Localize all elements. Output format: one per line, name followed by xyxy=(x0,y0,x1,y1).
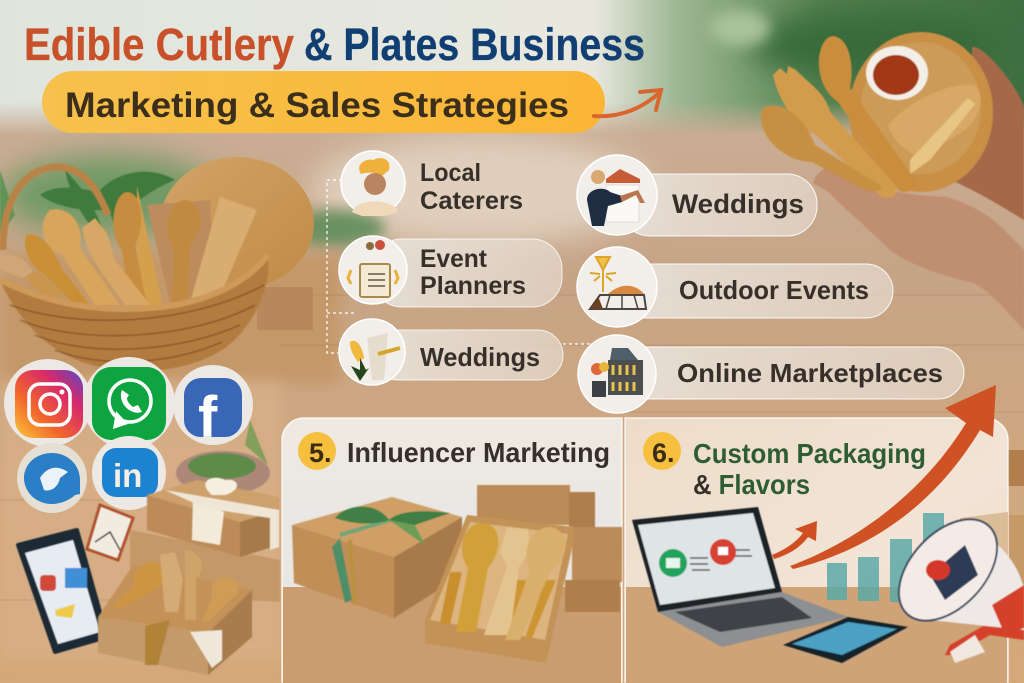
icon: Instagram xyxy=(4,359,92,447)
small spoon xyxy=(761,106,881,191)
box behind megaphone xyxy=(960,512,1008,585)
kraft boxes behind tray xyxy=(477,485,622,612)
lower box xyxy=(130,530,280,602)
plant leaves behind basket xyxy=(0,170,175,240)
icon: Facebook: f xyxy=(198,385,218,450)
sticks xyxy=(440,572,462,625)
left spoon xyxy=(25,234,90,305)
big growth arrow xyxy=(790,385,996,569)
list pill: Outdoor Events xyxy=(577,247,893,327)
subtitle pill: Marketing & Sales Strategies xyxy=(65,86,569,125)
forks on box xyxy=(160,552,183,612)
list item: Local Caterers: Caterers xyxy=(420,187,523,215)
list item: Local Caterers: Local xyxy=(420,159,481,187)
connector lines xyxy=(327,180,590,353)
list pill: Online Marketplaces: Online Marketplaces xyxy=(677,358,943,388)
subtitle pill xyxy=(42,71,605,133)
spoon left xyxy=(456,523,498,632)
small spoon and napkin xyxy=(28,271,65,297)
spoon on box xyxy=(112,562,166,608)
fork xyxy=(484,527,530,635)
plate xyxy=(849,32,993,192)
plate and cutlery held in hands xyxy=(761,32,1024,330)
icon: WhatsApp xyxy=(83,357,175,449)
folded cutlery on plate xyxy=(888,85,981,158)
social icons xyxy=(4,357,253,513)
list pill: Weddings left: Weddings xyxy=(420,342,540,372)
list pill: Weddings left xyxy=(339,319,563,385)
panel: 5 Influencer Marketing xyxy=(282,418,622,683)
white ribbon xyxy=(192,497,224,545)
arrow: subtitle to plate xyxy=(594,90,661,116)
potted plant xyxy=(176,420,270,495)
small red arrow xyxy=(772,521,817,559)
knife xyxy=(137,186,163,307)
fork xyxy=(82,218,150,305)
number badge 5: 5. xyxy=(309,438,332,468)
list pill: Event Planners xyxy=(339,236,562,307)
bar chart xyxy=(827,513,944,602)
spoon four xyxy=(167,200,200,305)
flat plate behind xyxy=(147,200,215,303)
title: Edible Cutlery xyxy=(24,19,294,70)
list pill: Event Planners: Planners xyxy=(420,272,526,300)
list pill: Weddings right xyxy=(577,155,817,236)
folded wrap xyxy=(190,197,257,303)
title xyxy=(24,19,645,70)
sauce bowl xyxy=(866,46,928,100)
heading: Custom Packaging xyxy=(693,438,926,469)
left hand and arm xyxy=(813,166,1024,330)
icon: Facebook xyxy=(173,365,253,450)
top box xyxy=(147,480,279,522)
fork xyxy=(773,66,896,198)
megaphone xyxy=(880,501,1024,663)
panel: 6 Custom Packaging & Flavors: & Flavors xyxy=(693,469,810,500)
spoon xyxy=(819,36,915,192)
number badge 5 xyxy=(298,432,336,470)
number badge 6: 6. xyxy=(652,438,675,468)
icon: LinkedIn xyxy=(92,436,166,510)
chef hat xyxy=(359,158,389,176)
list item: Local Caterers xyxy=(341,151,523,216)
tablet xyxy=(783,617,908,663)
kraft gift box with cutlery xyxy=(98,550,252,675)
big spoon xyxy=(43,209,120,305)
list pill: Outdoor Events: Outdoor Events xyxy=(679,275,869,305)
woven bowl xyxy=(0,255,268,371)
phone xyxy=(18,530,107,652)
spoon right xyxy=(505,527,566,640)
list pill: Weddings right: Weddings xyxy=(672,189,804,219)
number badge 6 xyxy=(643,432,681,470)
gift boxes stack xyxy=(87,478,280,602)
spoon three xyxy=(113,192,147,305)
list pill: Event Planners: Event xyxy=(420,245,488,273)
gift box with green ribbon xyxy=(292,497,462,618)
right hand xyxy=(950,47,1024,220)
laptop xyxy=(632,507,848,647)
tray with cutlery xyxy=(425,515,574,663)
kraft box beside basket xyxy=(257,287,313,330)
list pill: Online Marketplaces xyxy=(578,335,964,413)
spoon right on box xyxy=(202,577,239,622)
card xyxy=(87,505,133,560)
round wooden plate behind basket xyxy=(160,157,314,289)
icon: LinkedIn: in xyxy=(113,457,142,494)
icon: chat bird xyxy=(17,443,87,513)
basket with cutlery xyxy=(0,167,268,371)
title: & Plates Business xyxy=(304,19,645,70)
heading: Influencer Marketing xyxy=(347,437,610,468)
panel: 6 Custom Packaging & Flavors xyxy=(625,418,1024,683)
